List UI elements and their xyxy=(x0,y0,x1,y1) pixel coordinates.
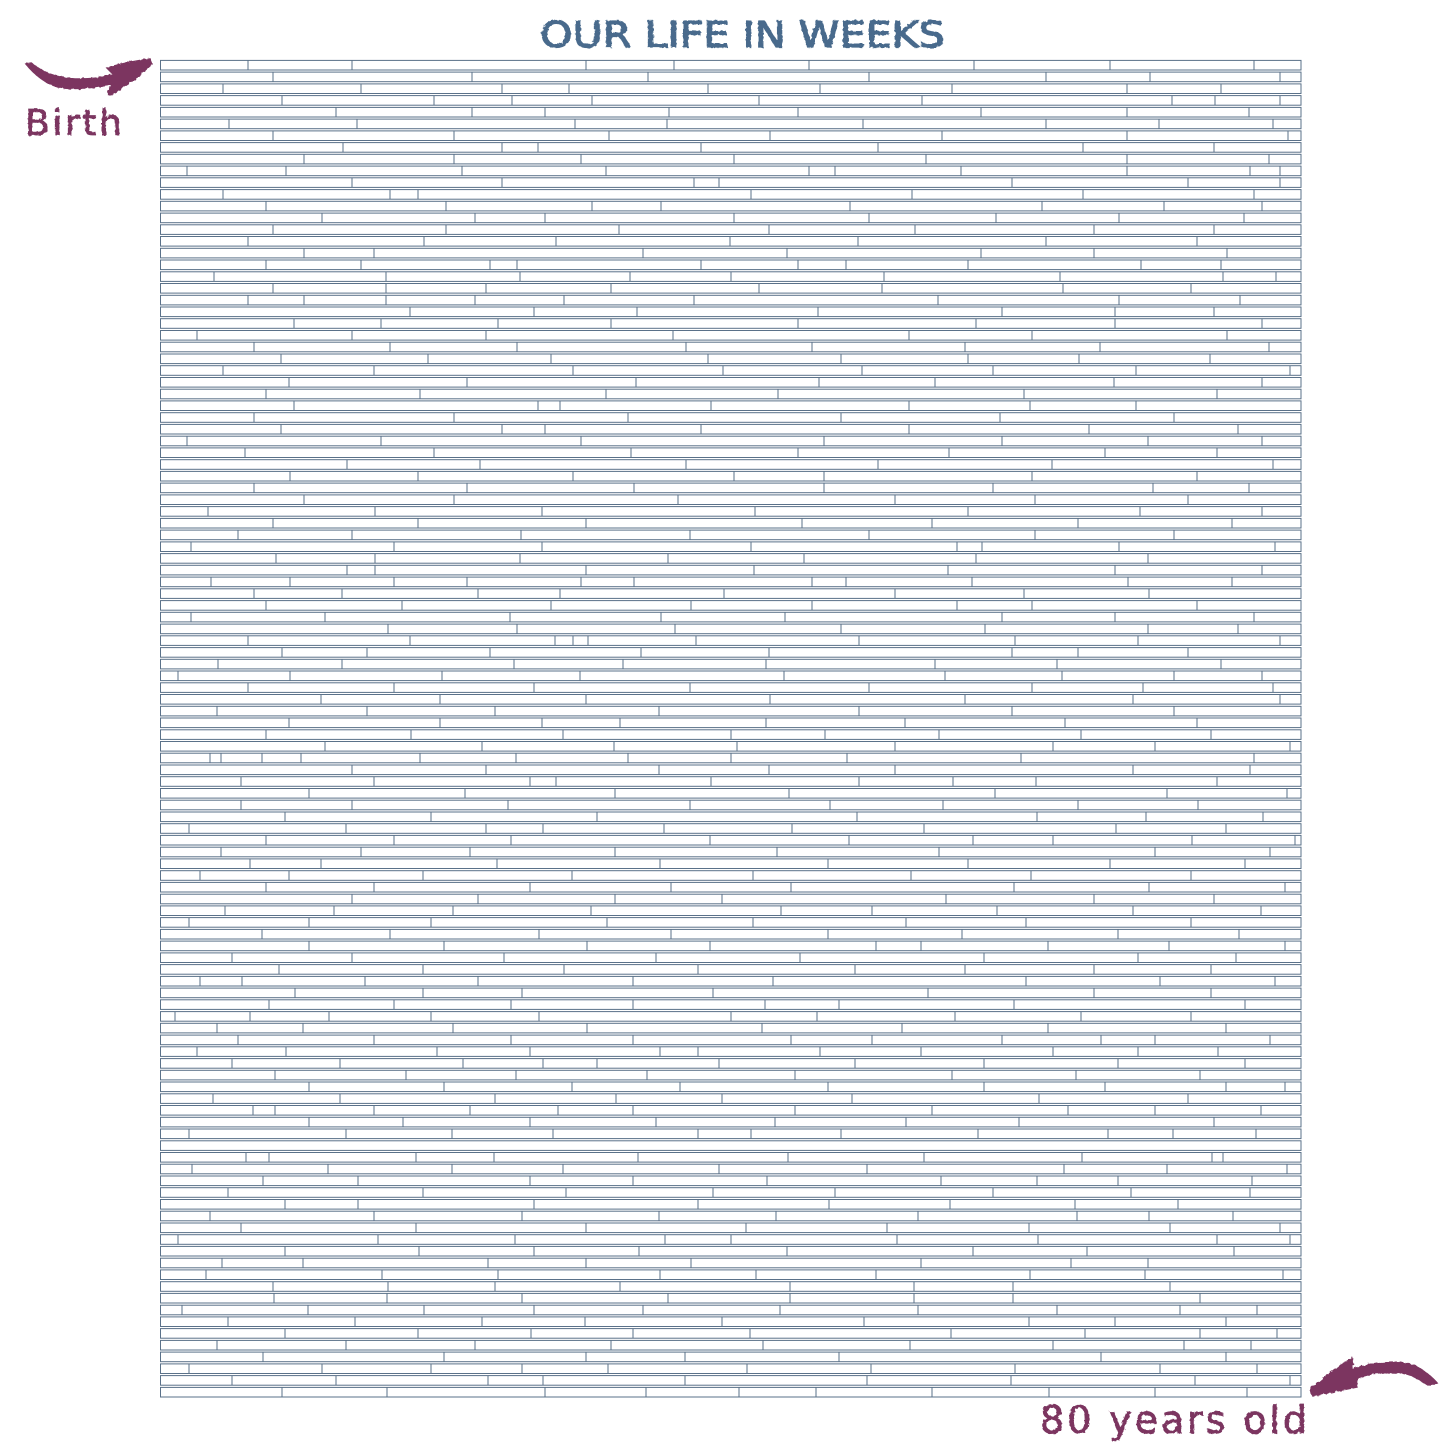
life-in-weeks grid xyxy=(160,60,1301,1397)
label: 80 years old: 80 years old xyxy=(1040,1398,1307,1442)
title: OUR LIFE IN WEEKS xyxy=(540,15,945,56)
arrow: 80 years old xyxy=(1310,1358,1437,1396)
label: birth: Birth xyxy=(25,103,122,144)
arrow: birth xyxy=(26,59,152,95)
